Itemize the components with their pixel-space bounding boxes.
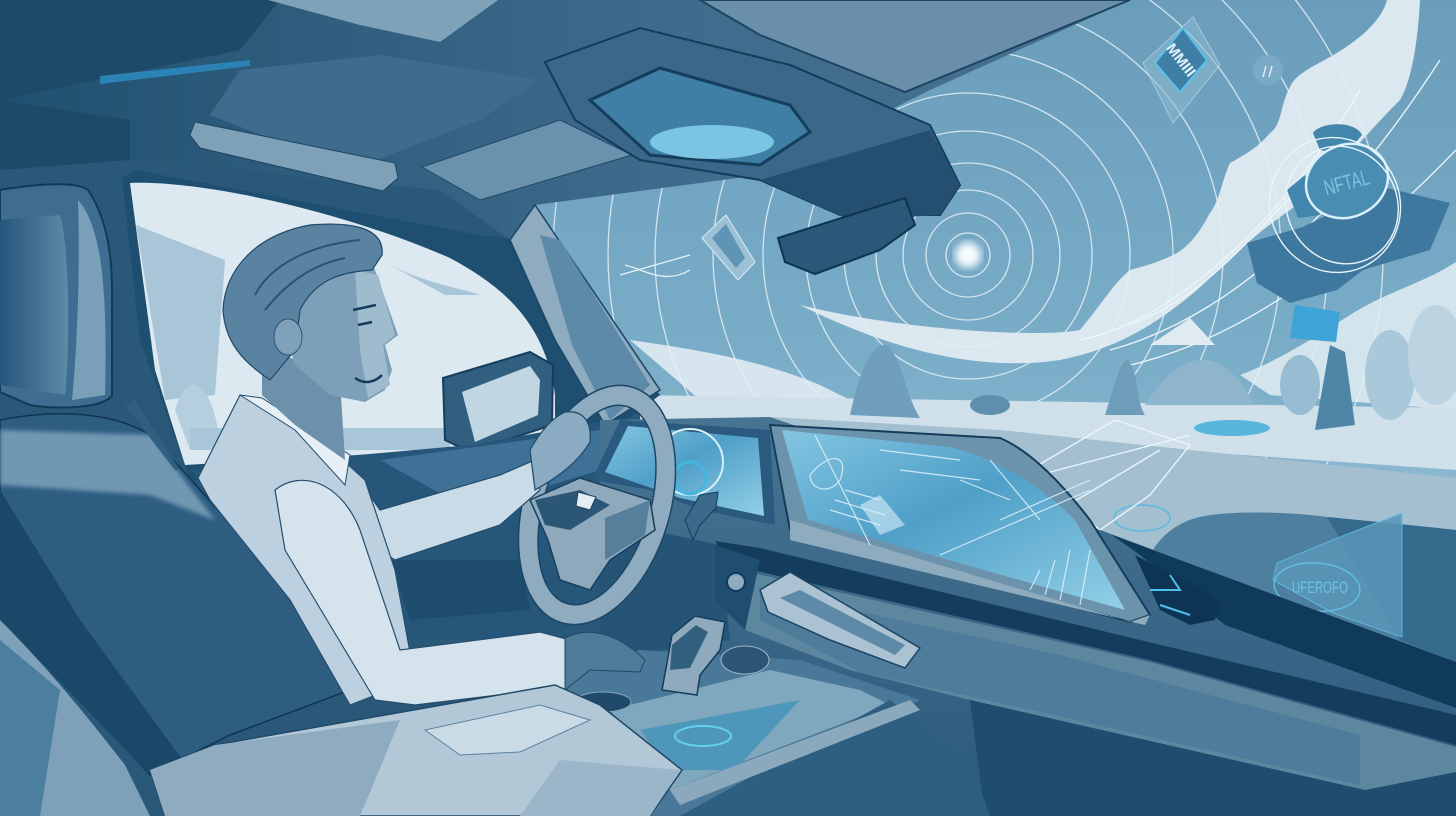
lower band [730,568,1456,790]
a-pillar [510,205,660,425]
HUD label [1272,559,1362,615]
grab handle [190,122,398,191]
wheel hub [530,478,655,590]
lower right clouds [1240,262,1456,410]
badge label: NFTAL [1321,165,1372,201]
torso shirt [198,395,415,705]
man [198,224,645,705]
right visor [700,0,1130,92]
console screen [590,68,810,165]
distant landscape [640,305,1456,470]
far arm sleeve [345,460,540,560]
near arm sleeve [275,480,570,705]
control panel [715,545,920,668]
icon: small shield [702,215,755,280]
hologram projection panel [1273,513,1402,637]
face highlight [355,270,395,398]
HUD label: UFEROFO [1292,578,1348,597]
dash edge [1112,535,1456,708]
dash lower dark stripe [715,541,1456,745]
seat back [0,414,350,775]
side mirror [443,352,553,452]
hand on wheel [530,412,590,490]
steering wheel [491,366,718,644]
HVAC display in dash [1135,555,1220,625]
armrest [150,685,682,816]
gear shifter [662,616,725,695]
dashboard [600,417,1456,816]
concentric rings [553,0,1383,670]
stalk [685,492,718,540]
door panel [190,420,640,640]
eye and smile [353,305,382,382]
overhead console [545,28,960,274]
roof [0,0,1130,240]
stripe [100,60,250,84]
wheel logo [576,492,596,510]
face [275,250,398,402]
neck [262,345,345,460]
seat side [0,620,150,816]
projection lines [1020,420,1190,530]
near hand [565,632,645,690]
collar [240,395,350,485]
roof liner panel [210,55,540,170]
ear [274,319,302,355]
hologram badge [1247,116,1450,342]
instrument cluster [592,420,775,525]
centre display [770,425,1150,625]
icon: floating tag [1143,17,1220,123]
icon: ring centre glow [955,242,981,268]
sweeping lines [1080,60,1456,365]
icon: floating tag: MMIII [1162,40,1199,80]
sun visor [422,120,632,200]
headrest [0,184,112,408]
windshield sky [520,0,1456,670]
centre console [540,616,990,816]
clouds band [800,0,1420,363]
side window [122,170,660,480]
driver seat [0,184,350,816]
icon: floating sketch [620,255,690,276]
sunroof [268,0,498,42]
HUD circle small [1114,505,1170,531]
gauge [657,429,723,495]
hair [223,224,382,380]
rearview mirror [778,198,915,274]
icon: small ring [1253,55,1283,85]
dashboard top reflected in windshield [770,417,1456,662]
